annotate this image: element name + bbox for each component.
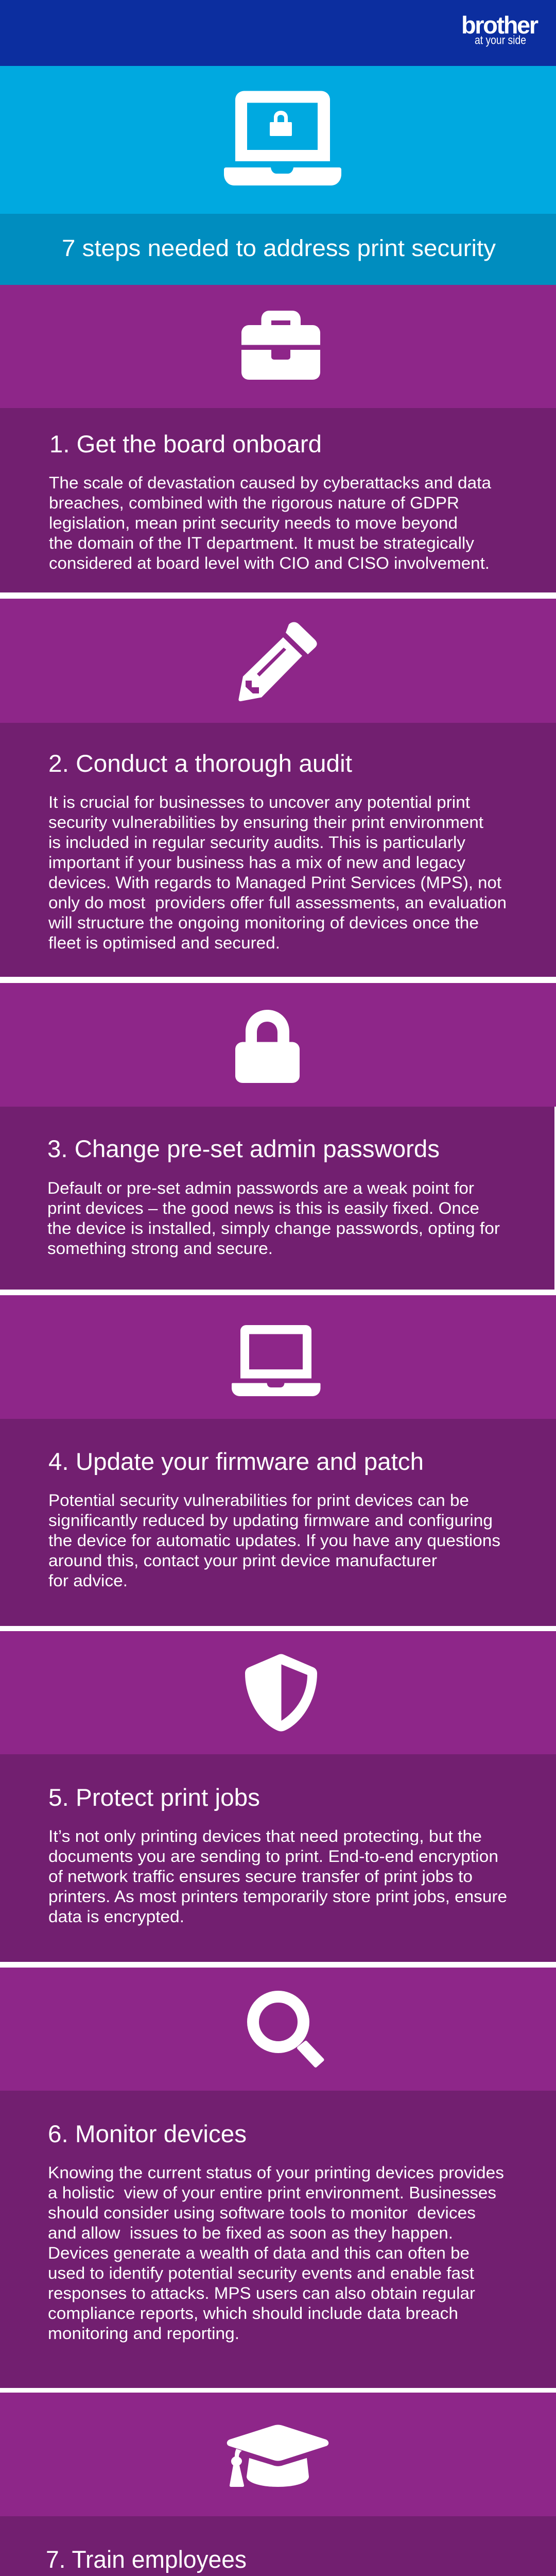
text block: step 4: for advice. xyxy=(48,1571,128,1590)
icon: briefcase xyxy=(241,311,320,380)
text block: step 5: It’s not only printing devices that need protecting, but the xyxy=(48,1827,482,1845)
icon: shield xyxy=(245,1654,317,1731)
heading: step 7: 7. Train employees xyxy=(46,2546,247,2573)
text block: step 1: the domain of the IT department. It must be strategically xyxy=(49,534,474,552)
text block: step 2: important if your business has a mix of new and legacy xyxy=(48,853,465,872)
heading: step 3: 3. Change pre-set admin passwords xyxy=(47,1135,440,1162)
text block: step 6: compliance reports, which should include data breach xyxy=(48,2304,458,2323)
text block: step 2: devices. With regards to Managed Print Services (MPS), not xyxy=(48,873,501,892)
brother logo: at your side xyxy=(475,33,526,46)
icon: magnifying glass xyxy=(253,1997,322,2066)
text block: step 3: print devices – the good news is this is easily fixed. Once xyxy=(47,1199,479,1217)
text block: step 3: something strong and secure. xyxy=(47,1239,273,1258)
text block: step 6: used to identify potential security events and enable fast xyxy=(48,2264,474,2282)
text block: step 6: responses to attacks. MPS users can also obtain regular xyxy=(48,2284,475,2302)
text block: step 5: documents you are sending to print. End-to-end encryption xyxy=(48,1847,498,1866)
text block: step 5: printers. As most printers temporarily store print jobs, ensure xyxy=(48,1887,507,1906)
text block: step 1: legislation, mean print security needs to move beyond xyxy=(49,514,458,532)
text block: step 2: fleet is optimised and secured. xyxy=(48,934,280,952)
text block: step 6: and allow issues to be fixed as soon as they happen. xyxy=(48,2224,453,2242)
text block: step 1 xyxy=(49,473,491,572)
brother logo: brother xyxy=(461,11,538,39)
text block: step 3 xyxy=(47,1179,500,1258)
panel: step 5 xyxy=(0,1631,556,1962)
heading: step 6: 6. Monitor devices xyxy=(48,2120,247,2147)
panel: step 4 xyxy=(0,1295,556,1626)
text block: step 2: only do most providers offer full assessments, an evaluation xyxy=(48,893,507,912)
heading: step 5: 5. Protect print jobs xyxy=(48,1784,260,1811)
text block: step 2: It is crucial for businesses to uncover any potential print xyxy=(48,793,470,811)
text block: step 5 xyxy=(48,1827,507,1926)
text block: step 6: Knowing the current status of your printing devices provides xyxy=(48,2163,504,2182)
heading: step 1: 1. Get the board onboard xyxy=(49,430,322,457)
text block: step 6: Devices generate a wealth of data and this can often be xyxy=(48,2244,470,2262)
text block: step 1: breaches, combined with the rigorous nature of GDPR xyxy=(49,494,459,512)
panel: step 1 xyxy=(0,285,556,592)
icon: laptop with padlock xyxy=(224,91,341,185)
text block: step 2 xyxy=(48,793,507,952)
icon: graduation cap xyxy=(227,2425,328,2487)
text block: step 3: Default or pre-set admin passwords are a weak point for xyxy=(47,1179,474,1197)
text block: step 4: the device for automatic updates. If you have any questions xyxy=(48,1531,500,1550)
panel: step 7 xyxy=(0,2393,556,2576)
text block: step 6 xyxy=(48,2163,504,2343)
hero panel xyxy=(0,66,556,214)
panel: step 6 xyxy=(0,1968,556,2388)
icon: pencil xyxy=(238,622,317,701)
title band xyxy=(0,214,556,285)
title: 7 steps needed to address print security xyxy=(62,235,496,261)
text block: step 6: should consider using software tools to monitor devices xyxy=(48,2204,476,2222)
text block: step 1: The scale of devastation caused by cyberattacks and data xyxy=(49,473,491,492)
icon: laptop xyxy=(232,1325,320,1396)
text block: step 4: around this, contact your print device manufacturer xyxy=(48,1551,437,1570)
text block: step 2: will structure the ongoing monitoring of devices once the xyxy=(48,913,479,932)
text block: step 4 xyxy=(48,1491,500,1590)
text block: step 4: Potential security vulnerabilities for print devices can be xyxy=(48,1491,469,1510)
header band xyxy=(0,0,556,66)
text block: step 6: a holistic view of your entire print environment. Businesses xyxy=(48,2183,496,2202)
text block: step 1: considered at board level with CIO and CISO involvement. xyxy=(49,554,490,572)
heading: step 2: 2. Conduct a thorough audit xyxy=(48,750,352,777)
icon: padlock xyxy=(235,1010,300,1083)
text block: step 5: data is encrypted. xyxy=(48,1907,184,1926)
text block: step 2: security vulnerabilities by ensuring their print environment xyxy=(48,813,483,832)
panel: step 2 xyxy=(0,599,556,977)
text block: step 6: monitoring and reporting. xyxy=(48,2324,239,2343)
text block: step 4: significantly reduced by updating firmware and configuring xyxy=(48,1511,493,1530)
text block: step 5: of network traffic ensures secure transfer of print jobs to xyxy=(48,1867,473,1886)
heading: step 4: 4. Update your firmware and patch xyxy=(48,1448,424,1475)
panel: step 3 xyxy=(0,983,556,1290)
text block: step 2: is included in regular security audits. This is particularly xyxy=(48,833,465,852)
text block: step 3: the device is installed, simply change passwords, opting for xyxy=(47,1219,500,1238)
